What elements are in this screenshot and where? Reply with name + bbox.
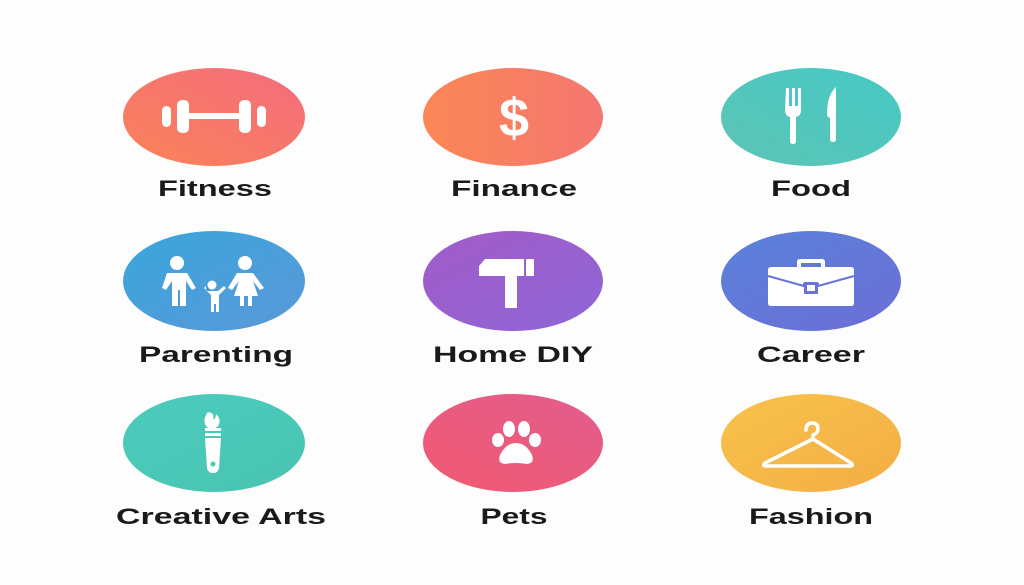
icon: dumbbell [162,100,266,133]
panel: parenting [123,231,305,367]
panel: food [721,68,901,201]
icon: paw [492,421,541,464]
icon: hammer [479,259,534,308]
panel: finance [423,68,603,201]
panel: home diy [423,231,603,367]
icon: paintbrush [204,412,221,473]
label: Parenting: Parenting [139,342,293,367]
icon: dollar: $ [499,88,529,148]
label: Fashion: Fashion [749,504,873,529]
icon: hanger [764,423,852,466]
label: Creative Arts: Creative Arts [116,504,326,529]
panel: fashion [721,394,901,529]
icon: fork and knife [785,87,836,144]
panel: fitness [123,68,305,201]
panel: career [721,231,901,367]
label: Finance: Finance [451,176,577,201]
label: Pets: Pets [480,504,548,529]
icon: family [162,256,264,312]
label: Food: Food [771,176,851,201]
label: Career: Career [757,342,866,367]
icon: briefcase [768,259,854,306]
label: Home DIY: Home DIY [433,342,593,367]
panel: pets [423,394,603,529]
label: Fitness: Fitness [158,176,272,201]
panel: creative arts [116,394,326,529]
